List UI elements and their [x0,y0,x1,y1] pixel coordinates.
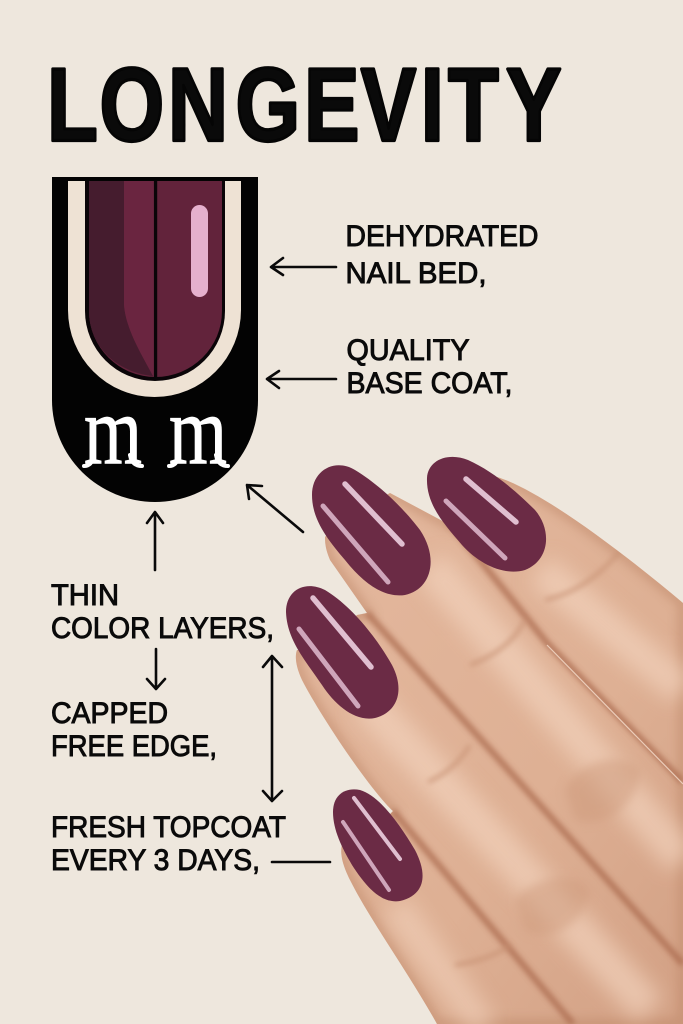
title: LONGEVITY [47,47,561,163]
nail: middle finger [427,457,546,572]
label: capped free edge [51,697,217,763]
label: dehydrated nail bed: NAIL BED, [346,257,486,290]
nail: little finger [333,789,423,901]
label: fresh topcoat [51,811,286,877]
label: thin color layers [51,579,274,645]
label: capped free edge: CAPPED [51,697,168,730]
label: thin color layers: THIN [51,579,119,612]
label: quality base coat: QUALITY [346,334,470,367]
arrow: to base coat [267,371,336,388]
label: thin color layers: COLOR LAYERS, [51,612,274,645]
nail: index finger [312,465,431,595]
label: fresh topcoat: EVERY 3 DAYS, [51,844,260,877]
hand [296,477,683,1024]
label: dehydrated nail bed [346,220,538,290]
nail: ring finger [286,586,398,719]
label: dehydrated nail bed: DEHYDRATED [346,220,538,253]
arrow: from hand to diagram [247,485,303,532]
label: quality base coat: BASE COAT, [346,367,512,400]
icon: decorative m marks: m [169,377,227,485]
label: fresh topcoat: FRESH TOPCOAT [51,811,286,844]
arrow: up to diagram [147,512,163,570]
icon: decorative m marks: m [84,377,142,485]
arrow: double headed [263,656,282,801]
nail diagram [52,177,258,502]
icon: decorative m marks [84,377,228,485]
connector line [272,861,330,863]
label: quality base coat [346,334,512,400]
label: capped free edge: FREE EDGE, [51,730,217,763]
arrow: down to capped edge [147,649,165,689]
arrow: to nail bed [271,258,336,275]
